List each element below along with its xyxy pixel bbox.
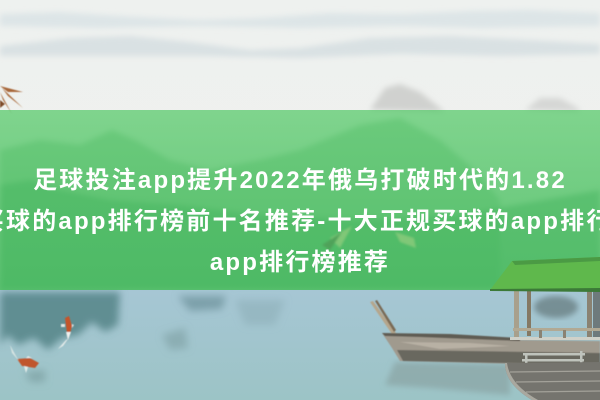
- title: 足球投注app提升2022年俄乌打破时代的1.82: [33, 167, 567, 194]
- title: app排行榜推荐: [210, 249, 390, 276]
- green leaves behind the title: [322, 226, 416, 250]
- icon: pavilion posts and rail: [510, 290, 600, 340]
- reflection of pavilion roof: [534, 296, 578, 318]
- water: [0, 290, 600, 400]
- wooden deck: [505, 362, 600, 400]
- icon: koi fish lower: [10, 345, 39, 373]
- mountain reflections in water: [0, 292, 285, 382]
- distant mountains: [0, 10, 600, 58]
- middle mountains in band: [0, 84, 600, 290]
- sky: [0, 0, 600, 290]
- icon: bench: [522, 351, 585, 366]
- icon: bamboo leaves top left: [0, 86, 23, 114]
- green title band: [0, 110, 600, 290]
- icon: pavilion roof: [490, 257, 600, 292]
- icon: boat: [370, 300, 600, 366]
- icon: koi fish upper: [58, 316, 74, 349]
- boat reflection: [385, 362, 510, 395]
